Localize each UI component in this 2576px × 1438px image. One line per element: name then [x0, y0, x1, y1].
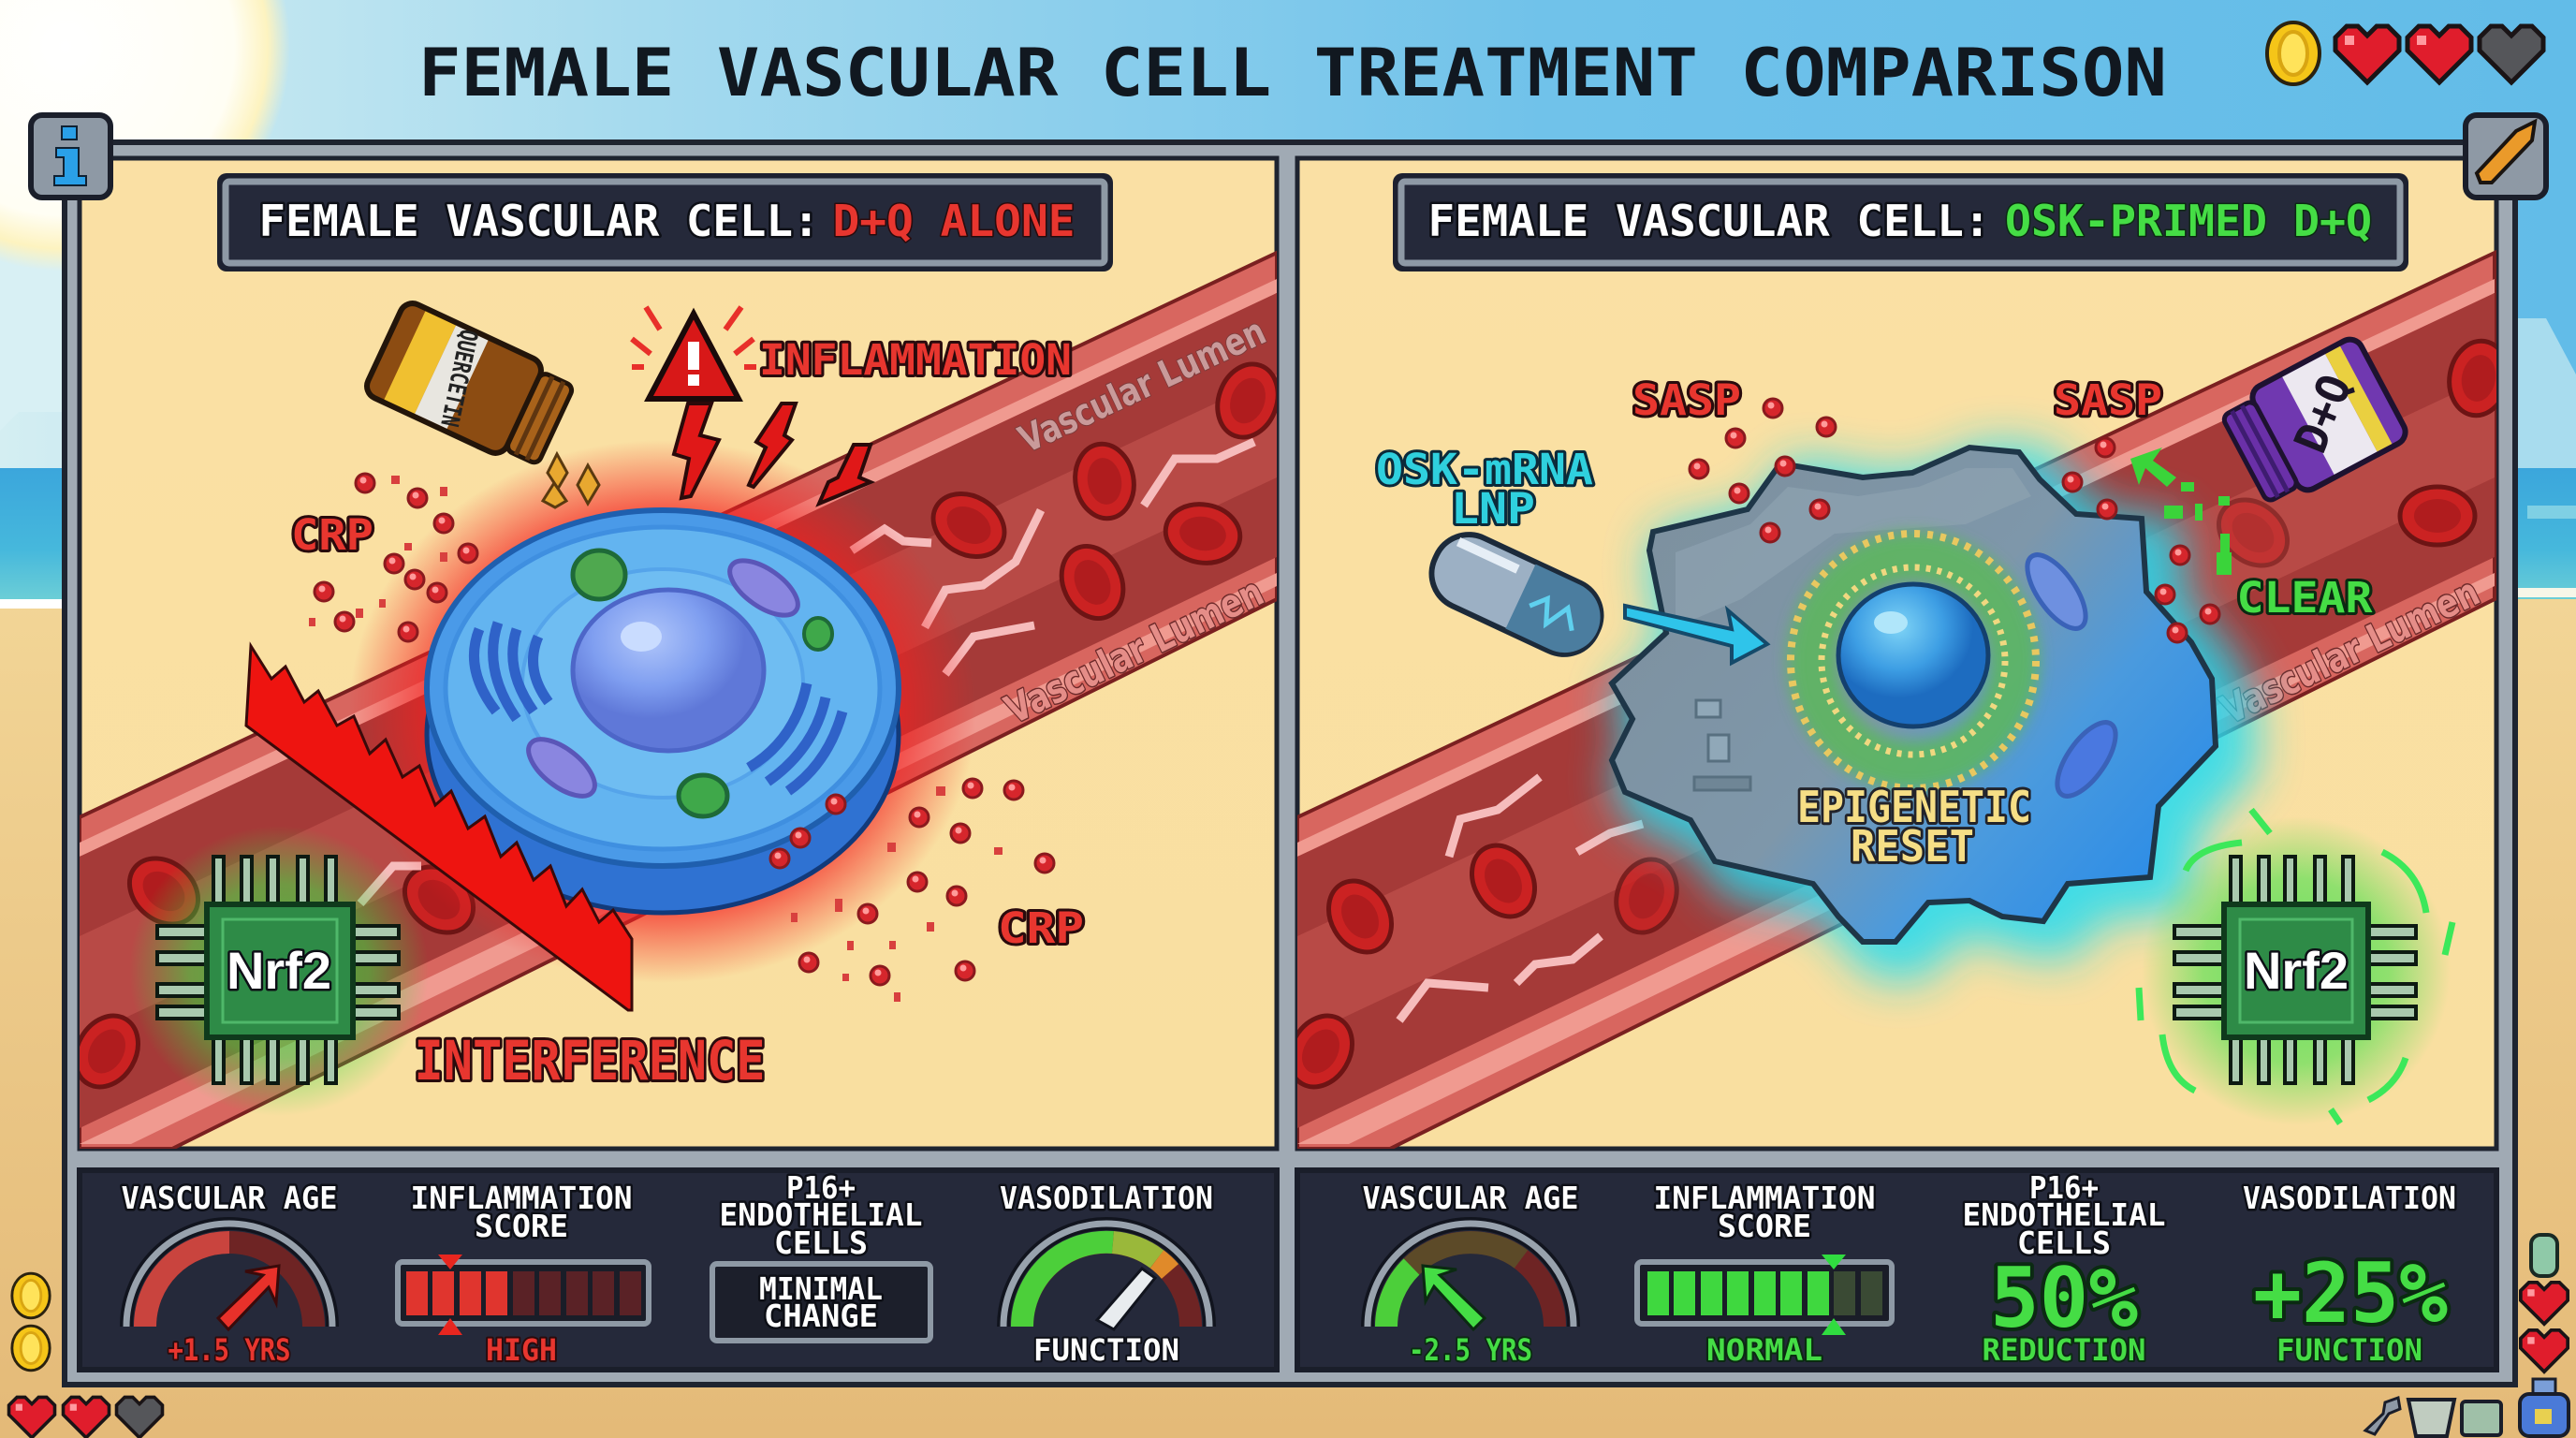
metric: p16+ endothelial cells: REDUCTION: [1983, 1332, 2145, 1368]
bottom-right inventory items: [2365, 1379, 2569, 1436]
metric: vascular age: [122, 1180, 337, 1368]
CRP particles lower right: [770, 779, 1054, 1002]
interference label: INTERFERENCE: [414, 1029, 766, 1093]
Nrf2 chip left: Nrf2: [227, 941, 331, 1000]
mitochondria: [2016, 546, 2127, 805]
info button: [31, 115, 110, 198]
Nrf2 chip left: [129, 826, 429, 1116]
D+Q bottle: D+Q: [2284, 368, 2363, 460]
quercetin bottle: [362, 299, 578, 473]
metric: p16+ endothelial cells: P16+: [786, 1169, 856, 1206]
blood vessel: [1277, 253, 2513, 1149]
inflammation label: INFLAMMATION: [759, 335, 1072, 385]
metric: vascular age: -2.5 YRS: [1409, 1332, 1532, 1368]
quercetin bottle: QUERCETIN: [434, 327, 482, 429]
metric: vascular age: +1.5 YRS: [168, 1332, 290, 1368]
title: FEMALE VASCULAR CELL TREATMENT COMPARISON: [418, 35, 2167, 111]
green clearance arrow and bits: [2130, 448, 2232, 575]
endothelial cell: [427, 510, 899, 913]
lightning bolts: [674, 404, 871, 504]
LNP capsule: [1420, 523, 1613, 666]
metric: inflammation score: SCORE: [1718, 1208, 1811, 1244]
organelles: [474, 550, 842, 816]
metric: inflammation score: [398, 1180, 649, 1368]
SASP particles: [1690, 399, 2219, 642]
metric: p16+ endothelial cells: P16+: [2029, 1169, 2099, 1206]
header: D+Q alone: [217, 173, 1113, 271]
right side potion and hearts: [2521, 1235, 2568, 1372]
top-right status icons: [2267, 22, 2543, 84]
metric: inflammation score: [1637, 1180, 1892, 1368]
metric: inflammation score: SCORE: [475, 1208, 568, 1244]
delivery arrow: [1625, 606, 1767, 663]
metric: p16+ endothelial cells: ENDOTHELIAL: [1962, 1196, 2166, 1233]
cyan glow: [1632, 464, 2236, 959]
CRP particles upper left: [309, 474, 477, 641]
metric: p16+ endothelial cells: [1962, 1169, 2166, 1368]
D+Q bottle: [2217, 335, 2409, 511]
metric: vasodilation: VASODILATION: [1000, 1180, 1213, 1216]
metric: p16+ endothelial cells: CELLS: [2017, 1225, 2111, 1261]
energy swirls: [2139, 810, 2452, 1123]
left side coins: [12, 1273, 50, 1371]
vascular lumen labels: [998, 310, 1272, 733]
header: D+Q alone: FEMALE VASCULAR CELL:: [258, 196, 820, 246]
epigenetic reset label: [1797, 782, 2031, 872]
metric: vasodilation: [2243, 1180, 2456, 1368]
epigenetic reset label: RESET: [1851, 821, 1974, 872]
SASP label left: SASP: [1632, 375, 1741, 425]
OSK-mRNA LNP label: OSK-mRNA: [1376, 445, 1593, 494]
vascular lumen labels: Vascular Lumen: [1013, 310, 1272, 462]
metric: vasodilation: FUNCTION: [2276, 1332, 2422, 1368]
metric: inflammation score: INFLAMMATION: [1653, 1180, 1876, 1216]
header: OSK-primed D+Q: FEMALE VASCULAR CELL:: [1428, 196, 1990, 246]
metric: p16+ endothelial cells: CELLS: [774, 1225, 868, 1261]
metric: vasodilation: FUNCTION: [1033, 1332, 1179, 1368]
dashboard: D+Q alone: [80, 1169, 1277, 1370]
metric: vascular age: VASCULAR AGE: [122, 1180, 337, 1216]
vascular lumen labels: Vascular Lumen: [998, 568, 1270, 733]
CRP label right: CRP: [998, 903, 1084, 953]
metric: p16+ endothelial cells: CHANGE: [764, 1298, 878, 1334]
nucleus: [1838, 584, 1988, 726]
blood vessel: [63, 253, 1288, 1149]
header: OSK-primed D+Q: OSK-PRIMED D+Q: [2005, 196, 2372, 246]
metric: vascular age: [1363, 1180, 1578, 1368]
metric: vasodilation: VASODILATION: [2243, 1180, 2456, 1216]
epigenetic reset label: EPIGENETIC: [1797, 782, 2031, 832]
bottom-left hearts: [9, 1397, 162, 1438]
drops: [543, 454, 599, 507]
OSK-mRNA LNP label: [1376, 445, 1593, 534]
metric: inflammation score: INFLAMMATION: [410, 1180, 633, 1216]
cell details: [1694, 700, 1750, 790]
dashboard: OSK-primed D+Q: [1297, 1169, 2496, 1370]
metric: p16+ endothelial cells: 50%: [1990, 1250, 2138, 1346]
Nrf2 chip right: [2139, 810, 2452, 1125]
OSK-mRNA LNP label: LNP: [1451, 484, 1535, 534]
header: D+Q alone: D+Q ALONE: [833, 196, 1075, 246]
nucleus: [573, 590, 764, 751]
metric: p16+ endothelial cells: ENDOTHELIAL: [719, 1196, 923, 1233]
metric: p16+ endothelial cells: [712, 1169, 930, 1341]
CRP label left: CRP: [291, 510, 373, 560]
clear label: CLEAR: [2237, 573, 2373, 623]
pencil button: [2466, 115, 2546, 198]
vascular lumen label: Vascular Lumen: [2214, 568, 2486, 733]
SASP label right: SASP: [2054, 375, 2162, 425]
header: OSK-primed D+Q: [1393, 173, 2408, 271]
metric: vascular age: VASCULAR AGE: [1363, 1180, 1578, 1216]
Nrf2 chip right: Nrf2: [2244, 941, 2349, 1000]
panel: OSK-primed D+Q: [1277, 158, 2513, 1149]
panel: D+Q alone: [63, 158, 1288, 1149]
red interference wedge: [246, 646, 632, 1010]
inflammation glow: [349, 440, 976, 983]
metric: vasodilation: [1000, 1180, 1213, 1368]
warning triangle: [632, 307, 756, 399]
swirl: [1791, 534, 2036, 788]
metric: inflammation score: NORMAL: [1706, 1332, 1822, 1368]
metric: p16+ endothelial cells: MINIMAL: [759, 1270, 883, 1307]
metric: inflammation score: HIGH: [486, 1332, 557, 1368]
metric: vasodilation: +25%: [2253, 1245, 2448, 1342]
senescent cell: [1612, 448, 2216, 942]
